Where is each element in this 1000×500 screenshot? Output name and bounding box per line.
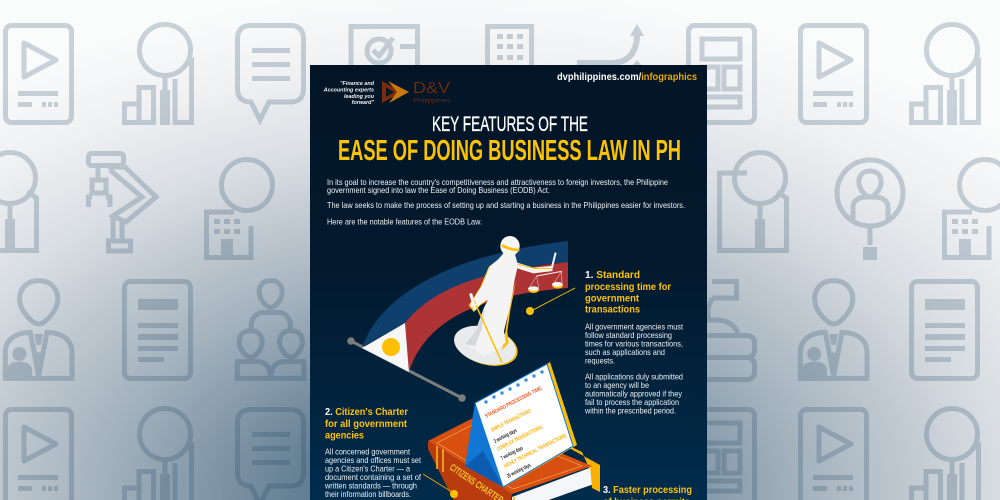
icon: magnifier box row 2 right (720, 152, 786, 251)
flag pole (347, 337, 466, 402)
logo wordmark (414, 82, 450, 104)
icon: magnifier building row 2 right (944, 160, 1000, 258)
feature 1 heading: 1. Standard (585, 270, 640, 281)
scales (528, 253, 563, 293)
calendar back stand (465, 403, 503, 487)
icon: play document row 4 right (800, 410, 866, 500)
feature 1 heading: transactions (585, 304, 640, 316)
feature 1 heading: processing time for (585, 282, 671, 293)
icon: person in magnifier (837, 160, 903, 260)
icon: play document row 1 right (800, 26, 866, 122)
icon: magnifier chart row 1 right (912, 24, 978, 125)
feature 1 heading (585, 270, 671, 316)
spine bands (437, 446, 514, 500)
icon: magnifier building row 2 (206, 160, 272, 258)
intro text: government signed into law the Ease of Doing Business (EODB) Act. (327, 186, 550, 195)
tagline (323, 81, 375, 106)
tagline: "Finance and (340, 81, 375, 87)
panel: infographic poster (310, 65, 707, 500)
book spine (428, 441, 512, 500)
feature 2 heading (325, 407, 408, 442)
feature 1 body text: All government agencies must (585, 323, 684, 332)
illustration: flag and Lady Justice (347, 236, 568, 402)
calendar text: 7 working days (500, 446, 524, 462)
calendar text: STANDARD PROCESSING TIME: (484, 385, 544, 420)
calendar text: HIGHLY TECHNICAL TRANSACTIONS: (503, 433, 568, 470)
feature 3 heading (603, 485, 692, 500)
icon: calculator layout row 4 (688, 410, 754, 500)
icon: robot arm (88, 154, 156, 251)
title line 1: KEY FEATURES OF THE (432, 113, 588, 136)
calendar binding rings (484, 370, 544, 404)
Lady Justice statue (450, 236, 563, 372)
book cover trim (437, 423, 582, 489)
icon: calculator layout row 1 (688, 26, 754, 122)
sword (471, 293, 502, 363)
calendar text: COMPLEX TRANSACTIONS: (496, 424, 544, 453)
icon: person row 3 right (800, 281, 867, 381)
feature 2 heading: for all government (325, 419, 407, 430)
calendar stand shade (465, 451, 503, 487)
feature 2 body text: All concerned government (325, 448, 411, 457)
title line 2: EASE OF DOING BUSINESS LAW IN PH (338, 135, 681, 167)
intro text: In its goal to increase the country's competitiveness and attractiveness to foreign investors, the Philippine (327, 178, 668, 187)
feature 1 body text: fail to process the application (585, 398, 679, 407)
feature 1 body text: times for various transactions, (585, 340, 683, 349)
intro text: Here are the notable features of the EODB Law. (327, 218, 482, 226)
feature 1 body text (584, 323, 684, 416)
tagline: leading you (344, 94, 375, 100)
icon: speech bubble row 4 (238, 410, 304, 500)
feature 2 heading: agencies (325, 430, 364, 442)
logo wordmark: Philippines (413, 98, 451, 104)
intro text: The law seeks to make the process of setting up and starting a business in the Philippines easier for investors. (327, 201, 685, 210)
icon: magnifier box row 2 left (0, 152, 36, 251)
icon: people group (237, 281, 304, 378)
icon: checklist (351, 26, 420, 65)
feature 2 body text: document containing a set of (325, 473, 422, 482)
calendar text (484, 385, 568, 480)
feature 1 body text: requests. (585, 357, 615, 366)
icon: magnifier chart row 1 (124, 24, 192, 125)
icon: office building (488, 26, 532, 65)
icon: play document row 1 (6, 26, 72, 122)
icon: magnifier chart row 4 right (912, 408, 978, 500)
feature 1 body text: All applications duly submitted (585, 373, 683, 382)
icon: magnifier chart row 4 (124, 408, 192, 500)
feature 1 heading: government (585, 294, 639, 304)
feature 2 body text: agencies and offices must set (325, 456, 422, 465)
feature 1 body text: within the prescribed period. (584, 407, 676, 416)
icon: growth arrow (577, 24, 644, 68)
website url: dvphilippines.com/infographics (557, 71, 697, 83)
book pages (512, 467, 594, 500)
icon: stacked papers (686, 282, 754, 380)
flag white triangle (362, 323, 409, 372)
calendar sheet (475, 364, 573, 487)
feature 2 body text: written standards — through (324, 482, 417, 491)
intro text (327, 178, 685, 226)
tagline: Accounting experts (323, 88, 374, 94)
calendar text: SIMPLE TRANSACTIONS: (490, 408, 533, 434)
calendar text: 20 working days (506, 463, 532, 480)
book gold corner (590, 465, 600, 492)
feature 1 connector (526, 288, 575, 315)
calendar yellow edge (503, 362, 577, 488)
flag blue stripe (362, 241, 568, 347)
icon: document row 3 (124, 282, 190, 378)
icon: play document row 4 (6, 410, 72, 500)
feature 1 body text: such as applications and (585, 348, 665, 357)
feature 2 connector (423, 474, 458, 498)
feature 2 heading: 2. Citizen's Charter (325, 407, 408, 418)
feature 2 body text (324, 448, 422, 499)
logo mark (382, 81, 409, 103)
book cover (428, 417, 592, 494)
flag red stripe (405, 262, 568, 372)
feature 1 body text: automatically approved if they (585, 390, 683, 399)
icon: person row 3 (5, 281, 72, 381)
illustration: book and desk calendar (428, 362, 600, 500)
tagline: forward" (352, 100, 374, 106)
feature 3 heading: 3. Faster processing (603, 485, 692, 496)
calendar text: 3 working days (493, 428, 518, 445)
logo and tagline (324, 81, 450, 104)
icon: document row 3 right (912, 282, 978, 378)
feature 2 body text: their information billboards. (325, 490, 411, 499)
feature 2 body text: up a Citizen's Charter — a (325, 465, 410, 474)
book back cover edge (570, 448, 600, 468)
logo wordmark: D&V (413, 80, 450, 97)
icon: speech bubble row 1 (238, 26, 304, 120)
feature 1 body text: to an agency will be (585, 381, 649, 390)
flag sun (382, 338, 400, 356)
feature 1 body text: follow standard processing (585, 331, 672, 340)
